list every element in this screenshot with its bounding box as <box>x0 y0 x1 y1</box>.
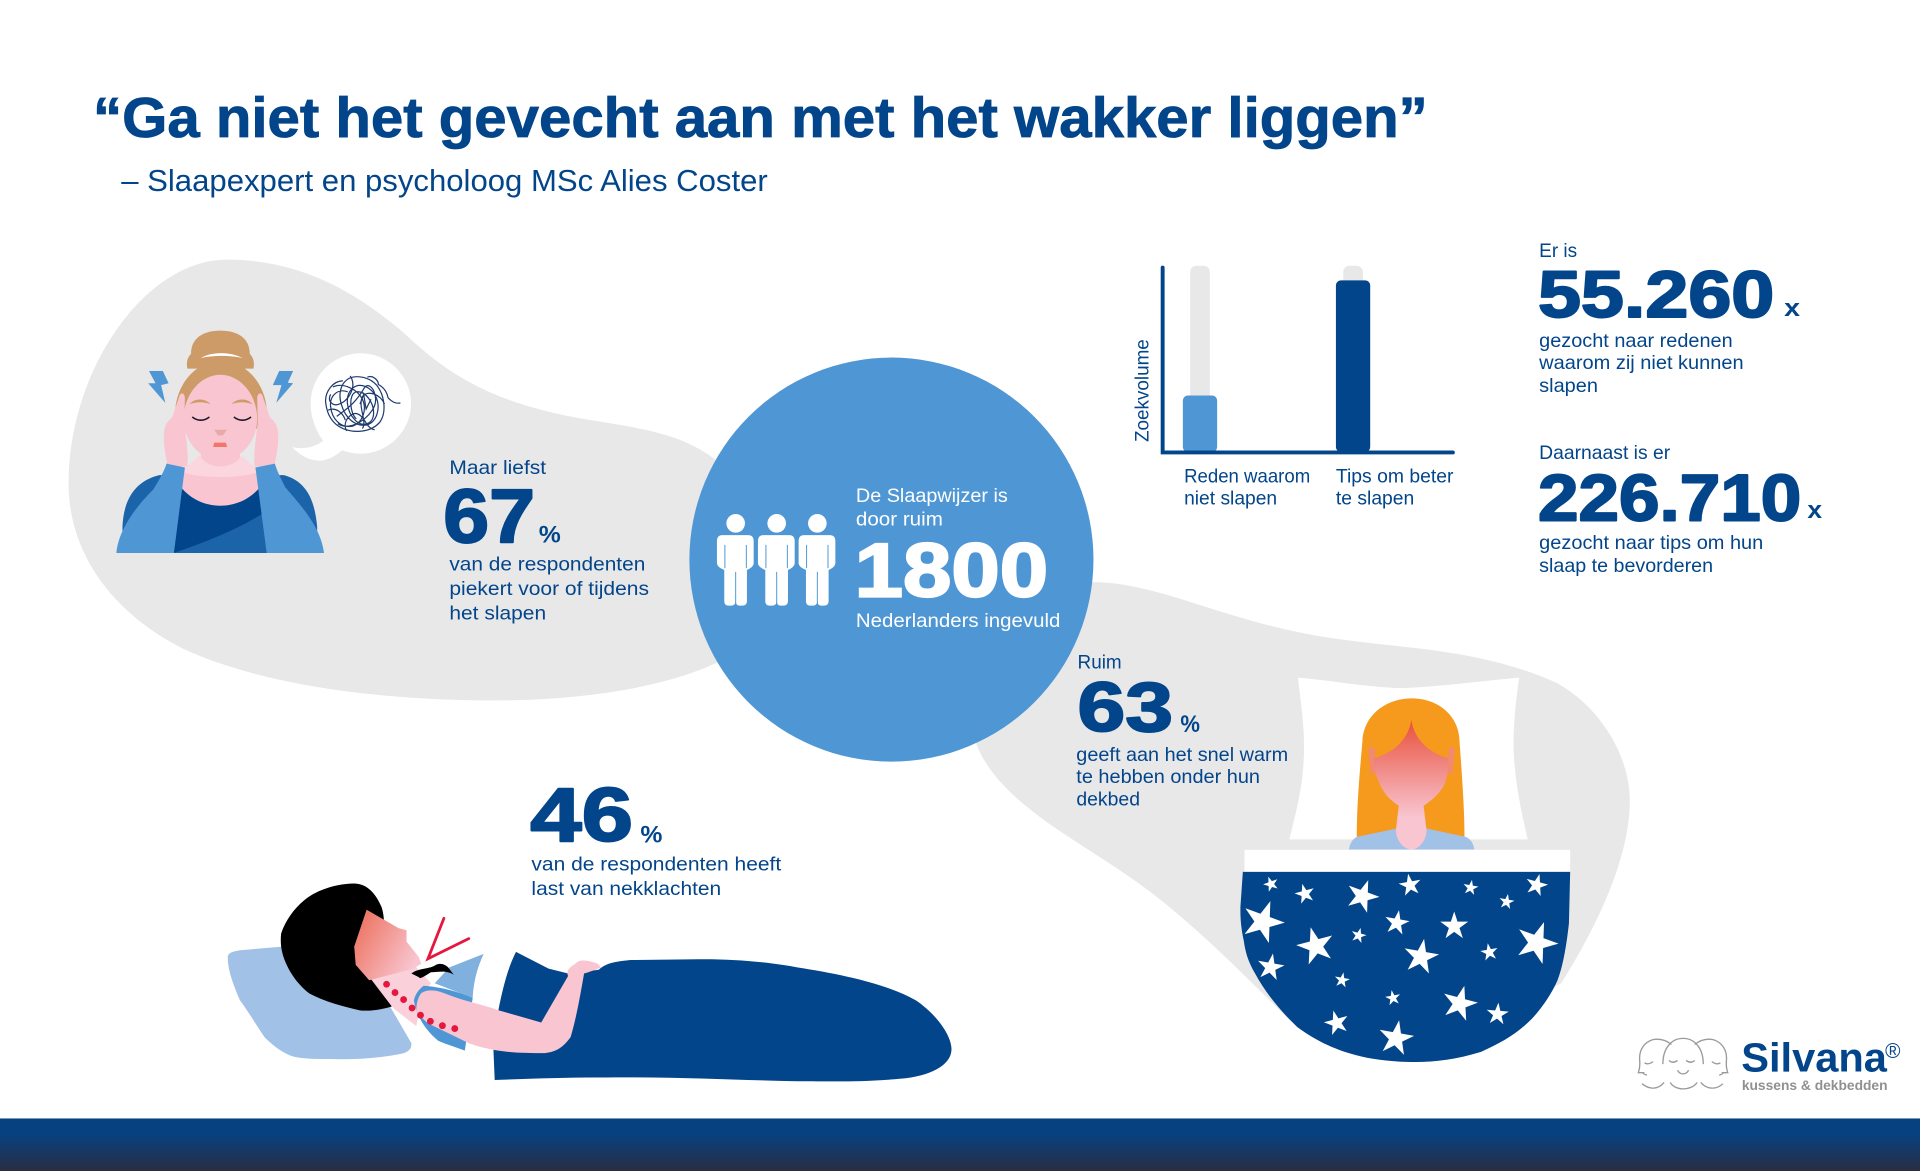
number: 46 <box>530 773 633 858</box>
description: dekbed <box>1076 789 1140 811</box>
description: van de respondenten heeft <box>531 854 782 876</box>
pillow <box>1289 678 1528 839</box>
face <box>354 910 421 980</box>
lead: Daarnaast is er <box>1539 442 1671 464</box>
neck shadow <box>181 456 260 477</box>
person 1 <box>717 514 754 606</box>
axes <box>1163 268 1453 452</box>
text block: 46 percent <box>530 773 782 900</box>
number: 1800 <box>855 528 1048 613</box>
text block: 1800 respondents <box>855 485 1060 632</box>
scribble <box>326 376 400 431</box>
description: te hebben onder hun <box>1076 766 1260 788</box>
lightning right <box>273 371 293 403</box>
text block: 67 percent <box>443 457 649 625</box>
lightning left <box>148 371 169 403</box>
number: 63 <box>1078 668 1173 746</box>
hair <box>175 361 267 429</box>
registered mark: ® <box>1885 1040 1900 1063</box>
mouth <box>213 443 227 447</box>
lead: Maar liefst <box>449 457 547 479</box>
hair band <box>201 353 242 358</box>
description: Nederlanders ingevuld <box>856 610 1060 632</box>
beard <box>411 964 454 978</box>
text block: 226.710 <box>1538 442 1822 577</box>
description: gezocht naar redenen <box>1539 330 1733 352</box>
percent: % <box>539 521 561 548</box>
panel: central circle <box>689 358 1093 762</box>
brows <box>190 400 252 404</box>
back shoulders <box>122 475 317 552</box>
text block: 63 percent <box>1076 652 1288 811</box>
right cardigan <box>255 464 324 553</box>
description: het slapen <box>449 603 546 625</box>
pain dots <box>383 981 458 1032</box>
face and neck <box>1374 720 1449 849</box>
panel: background blob warm <box>973 582 1630 1053</box>
subtitle: – Slaapexpert en psycholoog MSc Alies Coster <box>121 164 768 198</box>
number: 67 <box>443 474 535 559</box>
bar track 2 <box>1343 266 1363 451</box>
lead: Ruim <box>1078 652 1122 674</box>
person 2 <box>758 514 795 606</box>
stars <box>1237 871 1564 1056</box>
number: 226.710 <box>1538 461 1801 535</box>
neck and chest <box>181 441 260 506</box>
lead: De Slaapwijzer is <box>856 485 1008 507</box>
tagline: kussens & dekbedden <box>1742 1078 1888 1093</box>
category label 2: te slapen <box>1336 488 1414 510</box>
category label 2: Tips om beter <box>1336 465 1454 487</box>
logo: Silvana <box>1638 1034 1900 1093</box>
bar: tips <box>1336 280 1370 452</box>
multiplier: x <box>1784 295 1800 322</box>
description: van de respondenten <box>449 554 645 576</box>
bar chart: search volume <box>1132 266 1454 510</box>
description: last van nekklachten <box>531 878 721 900</box>
footer bar <box>0 1118 1920 1171</box>
description: geeft aan het snel warm <box>1076 744 1288 766</box>
title: “Ga niet het gevecht aan met het wakker liggen” <box>93 86 1428 149</box>
shirt shoulder <box>435 954 484 998</box>
text block: 55.260 <box>1538 240 1800 397</box>
lead: Er is <box>1539 240 1577 262</box>
neck <box>369 967 431 1026</box>
icon: sleeper with neck pain <box>228 883 952 1081</box>
wordmark: Silvana <box>1741 1034 1887 1080</box>
bun <box>187 331 254 369</box>
duvet top fold <box>1244 850 1570 872</box>
description: piekert voor of tijdens <box>449 578 649 600</box>
arm <box>416 960 601 1053</box>
bar: reasons <box>1183 396 1217 452</box>
bar track 1 <box>1190 266 1210 451</box>
icon: speech bubble with scribble <box>292 353 411 461</box>
shirt <box>1349 828 1474 849</box>
person 3 <box>799 514 835 606</box>
bubble <box>292 353 411 461</box>
top shade <box>174 513 267 553</box>
panel: background blob worrying <box>69 260 725 700</box>
description: waarom zij niet kunnen <box>1538 352 1744 374</box>
eyes <box>192 417 251 420</box>
percent: % <box>640 821 663 848</box>
icon: worried woman <box>116 331 324 553</box>
category label 1: niet slapen <box>1184 488 1277 510</box>
axis label: Zoekvolume <box>1132 339 1154 442</box>
pain marks <box>428 918 469 959</box>
category label 1: Reden waarom <box>1184 465 1310 487</box>
shirt sleeve <box>414 986 473 1051</box>
description: slapen <box>1539 375 1598 397</box>
hands <box>164 393 188 467</box>
description: slaap te bevorderen <box>1539 555 1713 577</box>
percent: % <box>1180 711 1200 738</box>
description: gezocht naar tips om hun <box>1539 532 1763 554</box>
lead: door ruim <box>856 508 943 530</box>
multiplier: x <box>1807 497 1822 524</box>
pillow <box>228 947 411 1059</box>
duvet <box>493 952 952 1081</box>
icon: three people <box>717 514 835 606</box>
hair <box>281 883 392 1011</box>
face <box>184 375 257 460</box>
nose <box>214 430 227 435</box>
ears <box>1368 747 1455 773</box>
logo faces <box>1638 1038 1728 1089</box>
icon: overheated sleeper under starry duvet <box>1237 678 1570 1062</box>
left cardigan <box>116 464 185 553</box>
top <box>174 490 267 553</box>
hair <box>1357 698 1464 837</box>
number: 55.260 <box>1538 258 1774 332</box>
duvet <box>1240 872 1570 1062</box>
